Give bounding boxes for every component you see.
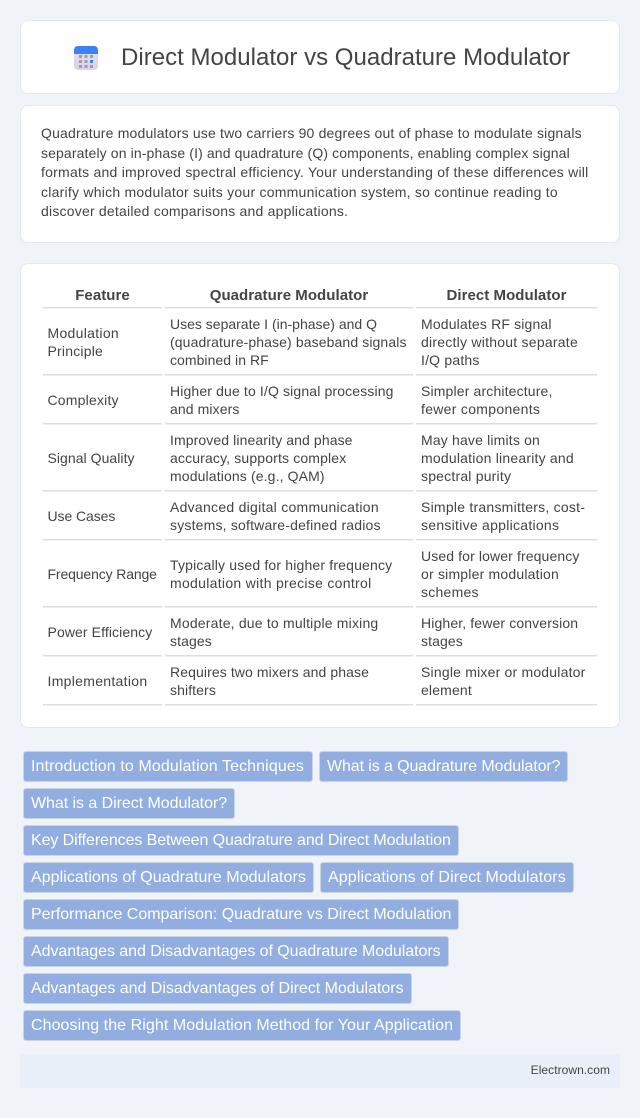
tag: Advantages and Disadvantages of Direct Modulators [31,980,404,997]
row: modulation principle: directly without separate [421,334,578,350]
row: signal quality: Improved linearity and phase [170,432,353,448]
row: modulation principle: I/Q paths [421,352,480,368]
tag: Choosing the Right Modulation Method for Your Application [31,1017,453,1034]
panel: title card [20,20,620,94]
tag [23,1010,461,1041]
row: use cases [48,499,585,533]
tag [23,751,313,782]
row: frequency range: Typically used for higher frequency [170,557,392,573]
row: implementation [48,664,586,698]
tag [320,862,574,893]
intro text [41,125,588,219]
row: use cases: Advanced digital communication [170,499,379,515]
icon: calendar [74,46,98,70]
tag: Applications of Quadrature Modulators [31,869,306,886]
panel: comparison table card [20,263,620,728]
row: complexity: and mixers [170,401,239,417]
tag [319,751,568,782]
tag [23,788,235,819]
tag: Introduction to Modulation Techniques [31,758,304,775]
row: power efficiency: Moderate, due to multiple mixing [170,615,378,631]
tag [23,862,314,893]
tag [23,825,459,856]
row: frequency range: modulation with precise control [170,575,372,591]
row: modulation principle [48,316,578,368]
row: frequency range: or simpler modulation [421,566,559,582]
row: signal quality: accuracy, supports complex [170,450,346,466]
intro text: discover detailed comparisons and applications. [41,203,348,219]
row: modulation principle: (quadrature-phase) baseband signals [170,334,407,350]
row: signal quality: modulations (e.g., QAM) [170,468,325,484]
row: power efficiency: Higher, fewer conversion [421,615,578,631]
row: power efficiency [48,615,578,649]
row: implementation: shifters [170,682,216,698]
row: modulation principle: Principle [48,343,103,359]
panel: intro card [20,105,620,243]
tag: What is a Quadrature Modulator? [327,758,560,775]
tag: Advantages and Disadvantages of Quadrature Modulators [31,943,441,960]
tag: Performance Comparison: Quadrature vs Direct Modulation [31,906,451,923]
row: frequency range: schemes [421,584,479,600]
row: modulation principle: Uses separate I (in-phase) and Q [170,316,377,332]
row: frequency range: Frequency Range [48,566,157,582]
table header: Feature [75,287,130,304]
row: signal quality: modulation linearity and [421,450,574,466]
row: frequency range [48,548,580,600]
table header [75,287,566,304]
tag [23,936,449,967]
intro text: clarify which modulator suits your communication system, so continue reading to [41,184,558,200]
row: use cases: sensitive applications [421,517,559,533]
row: power efficiency: Power Efficiency [48,624,152,640]
row: signal quality: Signal Quality [48,450,135,466]
intro text: formats and improved spectral efficiency. Your understanding of these differences will [41,164,588,180]
row: use cases: Use Cases [48,508,115,524]
title: Direct Modulator vs Quadrature Modulator [121,44,570,71]
row: use cases: systems, software-defined radios [170,517,381,533]
table header: Direct Modulator [446,287,566,304]
row: complexity: fewer components [421,401,540,417]
row: complexity [48,383,553,417]
row: implementation: Implementation [48,673,147,689]
tag [23,973,412,1004]
row: power efficiency: stages [170,633,212,649]
row: modulation principle: combined in RF [170,352,269,368]
row: complexity: Simpler architecture, [421,383,553,399]
intro text: separately on in-phase (I) and quadrature (Q) components, enabling complex signal [41,145,570,161]
row: modulation principle: Modulation [48,325,119,341]
row: use cases: Simple transmitters, cost- [421,499,585,515]
row: implementation: Single mixer or modulator [421,664,586,680]
row: implementation: Requires two mixers and phase [170,664,369,680]
tag: What is a Direct Modulator? [31,795,227,812]
footer [20,1054,620,1088]
footer: Electrown.com [531,1063,610,1077]
row: modulation principle: Modulates RF signal [421,316,552,332]
tag [23,899,459,930]
tag list [23,751,574,1041]
row: signal quality: May have limits on [421,432,540,448]
row: signal quality: spectral purity [421,468,511,484]
table header: Quadrature Modulator [210,287,368,304]
row: implementation: element [421,682,472,698]
row: power efficiency: stages [421,633,463,649]
intro text: Quadrature modulators use two carriers 90 degrees out of phase to modulate signals [41,125,582,141]
tag: Key Differences Between Quadrature and Direct Modulation [31,832,451,849]
row: frequency range: Used for lower frequency [421,548,580,564]
row: signal quality [48,432,574,484]
tag: Applications of Direct Modulators [328,869,566,886]
row: complexity: Complexity [48,392,119,408]
row: complexity: Higher due to I/Q signal processing [170,383,394,399]
